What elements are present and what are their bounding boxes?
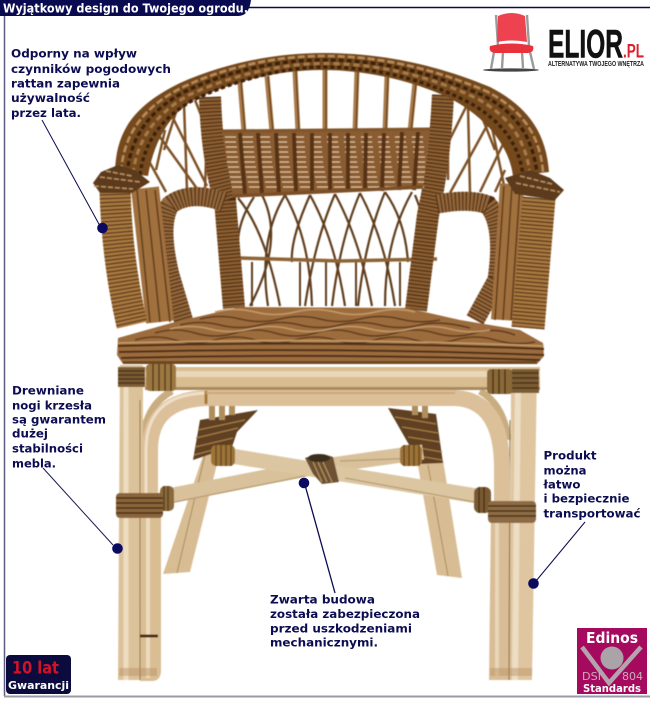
callout: easy transport: transportować (544, 506, 641, 520)
callout: wooden legs: mebla. (12, 456, 56, 470)
callout: easy transport: można (544, 464, 586, 478)
backrest rim (115, 53, 549, 176)
heading bar: Wyjątkowy design do Twojego ogrodu. (3, 0, 248, 16)
badge: Edinos DSI 804 Standards (577, 628, 647, 695)
inner leg braces (143, 391, 508, 440)
callout: weather-resistant rattan: rattan zapewnia (11, 76, 120, 90)
callout: wooden legs (12, 384, 123, 554)
callout: wooden legs: nogi krzesła (12, 398, 92, 412)
callout: weather-resistant rattan (11, 46, 171, 233)
stretcher bindings (160, 445, 491, 513)
callout: easy transport: i bezpiecznie (544, 492, 630, 506)
woven back panel (222, 129, 430, 197)
badge: 10 years warranty: Gwarancji (8, 679, 69, 692)
callout: easy transport: Produkt (544, 448, 597, 462)
back posts (210, 95, 443, 310)
back legs (163, 404, 462, 578)
woven seat (117, 307, 544, 364)
callout: compact construction (270, 478, 420, 650)
chair photo (93, 53, 564, 681)
badge: Edinos DSI 804 Standards: Standards (583, 683, 641, 695)
front arm posts (115, 184, 539, 328)
cross stretchers (160, 445, 491, 513)
badge: 10 years warranty (6, 655, 71, 694)
arm caps (93, 165, 564, 200)
arched rail (146, 391, 502, 505)
icon: red chair (483, 13, 539, 72)
front legs (118, 365, 537, 681)
callout: compact construction: Zwarta budowa (270, 592, 375, 606)
badge: Edinos DSI 804 Standards: 804 (622, 670, 643, 683)
callout: compact construction: mechanicznymi. (270, 636, 378, 650)
callout: weather-resistant rattan: przez lata. (11, 106, 81, 120)
side spindles (150, 100, 505, 193)
badge: Edinos DSI 804 Standards: Edinos (586, 629, 638, 647)
badge: 10 years warranty: 10 lat (12, 658, 59, 678)
callout: wooden legs: są gwarantem (12, 412, 106, 426)
callout: easy transport (528, 448, 641, 589)
callout: weather-resistant rattan: używalność (11, 91, 90, 105)
upper back spindles (240, 70, 416, 132)
badge: Edinos DSI 804 Standards: DSI (582, 670, 601, 683)
rattan leg wraps (116, 364, 539, 523)
callout: compact construction: przed uszkodzeniami (270, 622, 412, 636)
callout: easy transport: łatwo (542, 478, 580, 492)
logo: Elior (483, 13, 644, 72)
arm arches (164, 197, 500, 322)
lower lattice (238, 192, 437, 306)
callout: compact construction: została zabezpieczona (270, 607, 420, 621)
callout: weather-resistant rattan: Odporny na wpływ (11, 46, 137, 60)
callout: wooden legs: Drewniane (12, 384, 84, 398)
top rail (145, 367, 540, 390)
callout: wooden legs: stabilności (12, 442, 83, 456)
callout: weather-resistant rattan: czynników pogodowych (11, 62, 171, 76)
callout: wooden legs: dużej (12, 426, 48, 440)
